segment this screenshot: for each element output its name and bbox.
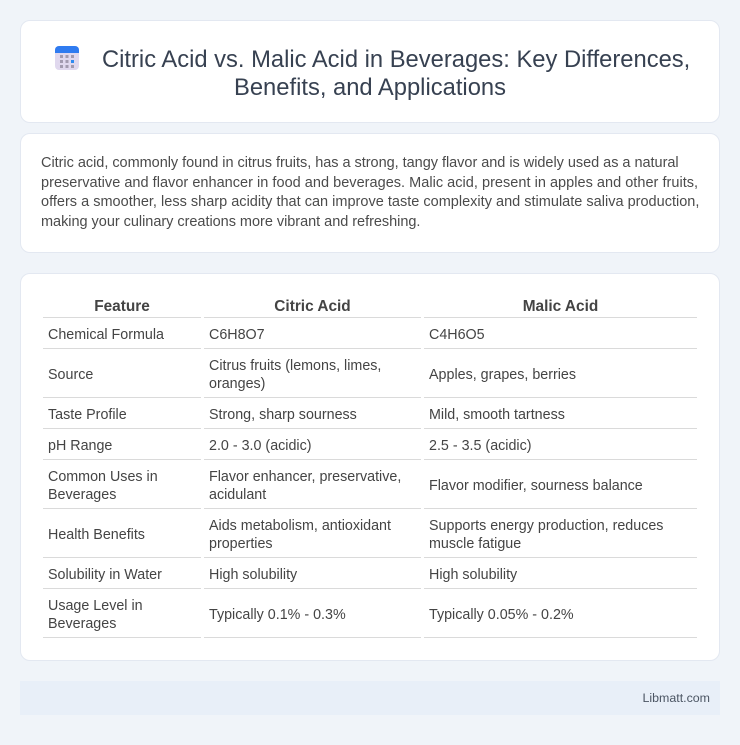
icon: calendar grid bbox=[55, 46, 79, 70]
title bbox=[102, 46, 690, 101]
row: chemical formula: Chemical Formula bbox=[48, 327, 164, 343]
panel: title card bbox=[20, 20, 720, 123]
table header: malic acid: Malic Acid bbox=[523, 298, 598, 315]
footer bar bbox=[20, 681, 720, 715]
row: pH range: pH Range bbox=[48, 438, 112, 454]
row: source: Source bbox=[48, 367, 93, 383]
text block: introduction: offers a smoother, less sharp acidity that can improve taste complexity and stimulate saliva production, bbox=[41, 194, 699, 210]
citric source: oranges) bbox=[209, 376, 265, 392]
citric uses: acidulant bbox=[209, 487, 266, 503]
citric usage: Typically 0.1% - 0.3% bbox=[209, 607, 346, 623]
citric source bbox=[209, 358, 381, 392]
row: health benefits: Health Benefits bbox=[48, 527, 145, 543]
row: solubility: Solubility in Water bbox=[48, 567, 162, 583]
citric benefits: properties bbox=[209, 536, 273, 552]
table header: feature: Feature bbox=[94, 298, 150, 315]
citric formula: C6H8O7 bbox=[209, 327, 265, 343]
malic usage: Typically 0.05% - 0.2% bbox=[429, 607, 574, 623]
citric uses bbox=[209, 469, 401, 503]
panel: comparison table card bbox=[20, 273, 720, 661]
malic solubility: High solubility bbox=[429, 567, 517, 583]
citric pH: 2.0 - 3.0 (acidic) bbox=[209, 438, 312, 454]
citric uses: Flavor enhancer, preservative, bbox=[209, 469, 401, 485]
citric taste: Strong, sharp sourness bbox=[209, 407, 357, 423]
citric benefits: Aids metabolism, antioxidant bbox=[209, 518, 391, 534]
malic source: Apples, grapes, berries bbox=[429, 367, 576, 383]
citric solubility: High solubility bbox=[209, 567, 297, 583]
malic uses: Flavor modifier, sourness balance bbox=[429, 478, 643, 494]
panel: introduction card bbox=[20, 133, 720, 253]
table header: citric acid: Citric Acid bbox=[274, 298, 351, 315]
row: common uses bbox=[48, 469, 158, 503]
footer credit: Libmatt.com bbox=[643, 691, 710, 705]
row: taste profile: Taste Profile bbox=[48, 407, 127, 423]
text block: introduction bbox=[41, 155, 699, 230]
row: common uses: Common Uses in bbox=[48, 469, 158, 485]
malic taste: Mild, smooth tartness bbox=[429, 407, 565, 423]
row: usage level: Beverages bbox=[48, 616, 116, 632]
text block: introduction: making your culinary creations more vibrant and refreshing. bbox=[41, 214, 420, 230]
title: Benefits, and Applications bbox=[234, 74, 506, 101]
citric source: Citrus fruits (lemons, limes, bbox=[209, 358, 381, 374]
text block: introduction: preservative and flavor enhancer in food and beverages. Malic acid, present in apples and other fruits, bbox=[41, 174, 698, 190]
title: Citric Acid vs. Malic Acid in Beverages: Key Differences, bbox=[102, 46, 690, 73]
row: usage level bbox=[48, 598, 143, 632]
row: common uses: Beverages bbox=[48, 487, 116, 503]
malic pH: 2.5 - 3.5 (acidic) bbox=[429, 438, 532, 454]
row: usage level: Usage Level in bbox=[48, 598, 143, 614]
malic formula: C4H6O5 bbox=[429, 327, 485, 343]
citric benefits bbox=[209, 518, 391, 552]
text block: introduction: Citric acid, commonly found in citrus fruits, has a strong, tangy flavor and is widely used as a natural bbox=[41, 155, 679, 171]
malic benefits bbox=[429, 518, 663, 552]
malic benefits: muscle fatigue bbox=[429, 536, 521, 552]
malic benefits: Supports energy production, reduces bbox=[429, 518, 663, 534]
